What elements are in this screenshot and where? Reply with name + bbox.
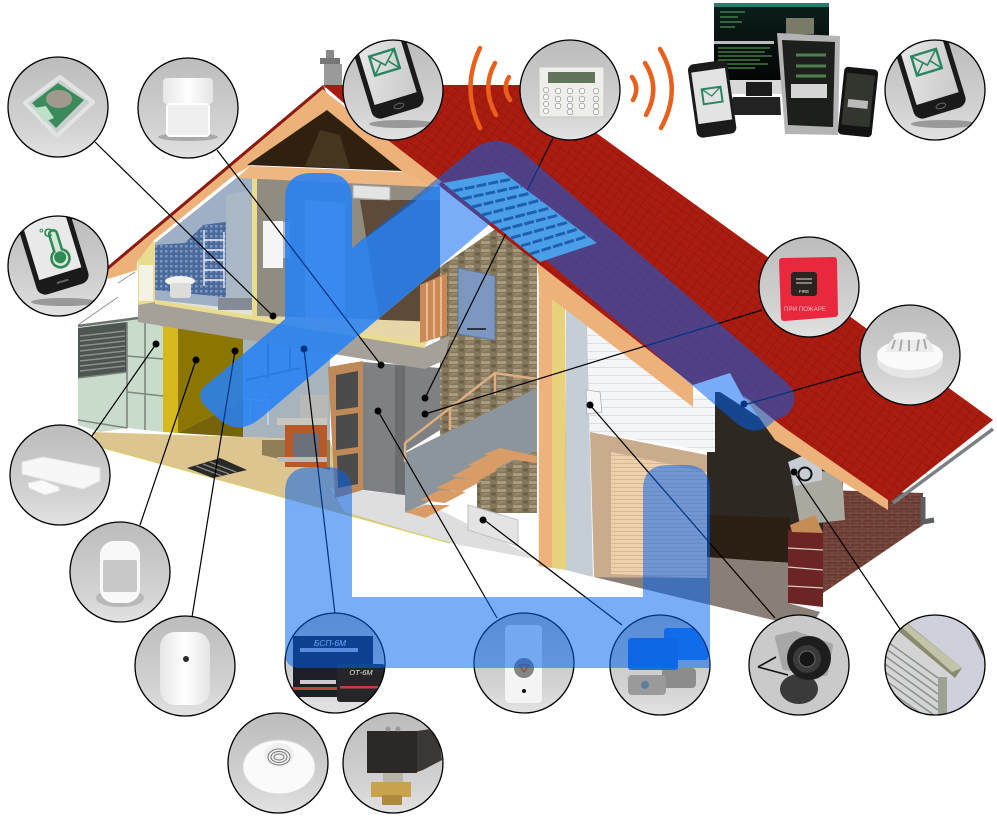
circle: remote button: [474, 613, 574, 713]
small phone: [838, 66, 878, 138]
circle: shutter: [886, 616, 984, 714]
sunroom: [78, 272, 163, 432]
circle: message phone right: [886, 40, 984, 140]
circle: door contact: [10, 425, 110, 525]
circle: temperature phone: °C: [39, 226, 53, 240]
interior door and walls: [328, 361, 440, 498]
connector dots: [152, 312, 798, 524]
zone: upper floor chevron: [200, 141, 795, 431]
staircase: [405, 373, 537, 546]
circle: white glass-break sensor: [135, 616, 235, 716]
circle: wireless sensor board: [8, 57, 108, 157]
red roof: [108, 85, 993, 503]
left wall and slab: [138, 178, 450, 369]
bathroom: [155, 178, 252, 317]
tablet: [777, 33, 840, 135]
circle: valves: [610, 615, 710, 715]
circle: keypad panel: [520, 40, 620, 140]
monitor: [714, 3, 829, 115]
circle: solenoid valve: [343, 713, 443, 813]
brick wall and window: [788, 452, 923, 607]
circle: leak controller: ОТ-6М: [349, 668, 373, 677]
blue zone overlays: [200, 141, 795, 668]
gutter: [893, 429, 993, 522]
circle: fire call point: FIRE: [799, 289, 809, 294]
circle: white sensor: [138, 58, 238, 158]
wifi waves right: [632, 49, 672, 128]
circle: temperature phone: [8, 216, 108, 316]
house illustration: [78, 50, 993, 628]
blue roof lattice: [443, 172, 597, 262]
circle: leak controller: [286, 614, 384, 712]
chimney: [320, 50, 342, 88]
circle: siren: [228, 713, 328, 813]
circle: leak controller: БСП-6М: [314, 638, 347, 648]
left phone: [687, 60, 737, 138]
circle: motion sensor: [70, 522, 170, 622]
lit blue underlay inside house: [200, 173, 440, 427]
circle: camera: [749, 615, 849, 715]
upper floor: [257, 178, 447, 346]
devices group: [687, 3, 878, 138]
wifi waves left: [470, 48, 510, 128]
circle: fire call point: ПРИ ПОЖАРЕ: [784, 306, 826, 313]
stone wall: [440, 228, 537, 513]
ground floor: [92, 325, 540, 560]
garage: [538, 270, 843, 628]
circle: smoke detector: [860, 305, 960, 405]
zone: lower loop: [285, 465, 710, 668]
circle: fire call point: [759, 237, 859, 337]
connector lines: [92, 138, 900, 629]
roof wooden trim: [108, 89, 888, 510]
circle: message phone on roof: [344, 40, 442, 140]
